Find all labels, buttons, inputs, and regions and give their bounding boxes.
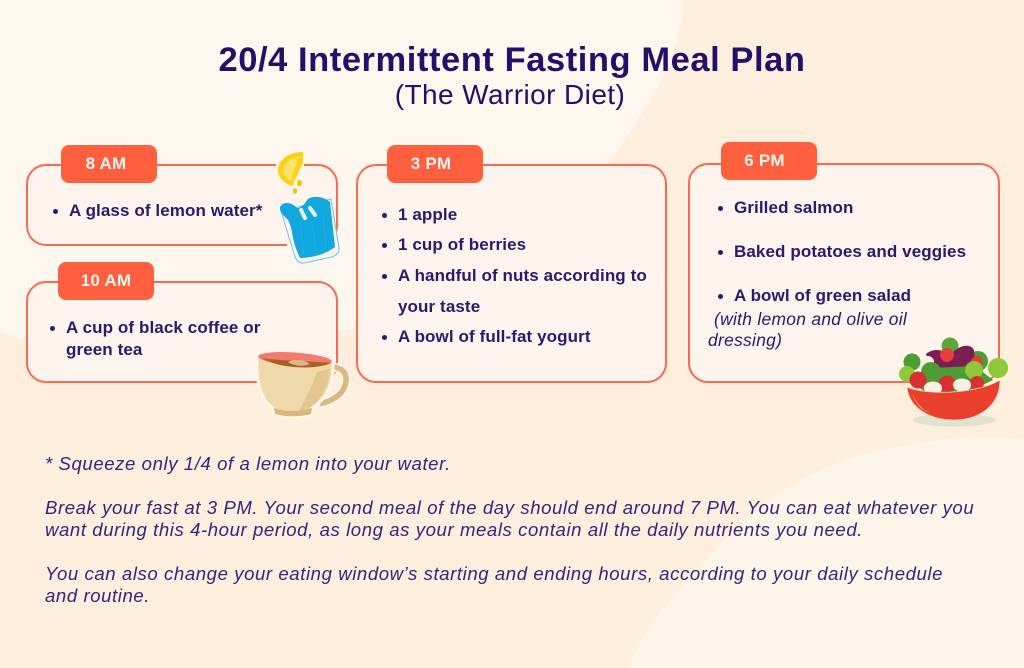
list: 1 apple bbox=[398, 205, 457, 224]
icon: lemon and glass of water bbox=[276, 152, 340, 264]
icon: salad bowl bbox=[899, 338, 1008, 426]
card outline 8 AM bbox=[26, 164, 338, 246]
list bbox=[382, 205, 647, 346]
panel: 6 PM bbox=[688, 142, 1000, 383]
note: schedule bbox=[45, 563, 943, 606]
note: schedule: You can also change your eating window’s starting and ending hours, according to your daily schedule bbox=[45, 563, 943, 584]
list item: green tea bbox=[66, 340, 142, 359]
title: 20/4 Intermittent Fasting Meal Plan bbox=[218, 41, 806, 79]
card outline 6 PM bbox=[688, 163, 1000, 383]
card outline 10 AM bbox=[26, 281, 338, 383]
list item: A cup of black coffee or bbox=[66, 318, 260, 337]
note: lemon: * Squeeze only 1/4 of a lemon into your water. bbox=[45, 453, 451, 474]
list item: A glass of lemon water* bbox=[69, 201, 262, 220]
list item bbox=[50, 318, 260, 359]
list bbox=[708, 198, 966, 350]
list: dressing) bbox=[708, 330, 782, 350]
list: A bowl of green salad bbox=[734, 286, 911, 305]
time tag 8 AM bbox=[61, 145, 157, 183]
panel: 10 AM bbox=[26, 262, 338, 383]
time tag 3 PM bbox=[387, 145, 483, 183]
time tag 6 PM bbox=[721, 142, 817, 180]
note: eating window: want during this 4-hour period, as long as your meals contain all the daily nutrients you need. bbox=[45, 519, 863, 540]
list: Baked potatoes and veggies bbox=[734, 242, 966, 261]
panel: 8 AM bbox=[26, 145, 338, 246]
subtitle: (The Warrior Diet) bbox=[395, 79, 625, 110]
time tag 10 AM: 10 AM bbox=[81, 271, 131, 290]
list: (with lemon and olive oil bbox=[714, 309, 907, 329]
time tag 6 PM: 6 PM bbox=[744, 151, 785, 170]
panel: 3 PM bbox=[356, 145, 667, 383]
list: your taste bbox=[398, 297, 480, 316]
card outline 3 PM bbox=[356, 164, 667, 383]
time tag 3 PM: 3 PM bbox=[411, 154, 451, 173]
time tag 10 AM bbox=[58, 262, 154, 300]
note: eating window bbox=[45, 497, 974, 540]
icon: coffee cup bbox=[256, 352, 350, 418]
list: A handful of nuts according to bbox=[398, 266, 647, 285]
list: 1 cup of berries bbox=[398, 235, 526, 254]
time tag 8 AM: 8 AM bbox=[86, 154, 126, 173]
note: eating window: Break your fast at 3 PM. Your second meal of the day should end around 7 PM. You can eat whatever you bbox=[45, 497, 974, 518]
note: schedule: and routine. bbox=[45, 585, 150, 606]
list: Grilled salmon bbox=[734, 198, 854, 217]
list: A bowl of full-fat yogurt bbox=[398, 327, 591, 346]
